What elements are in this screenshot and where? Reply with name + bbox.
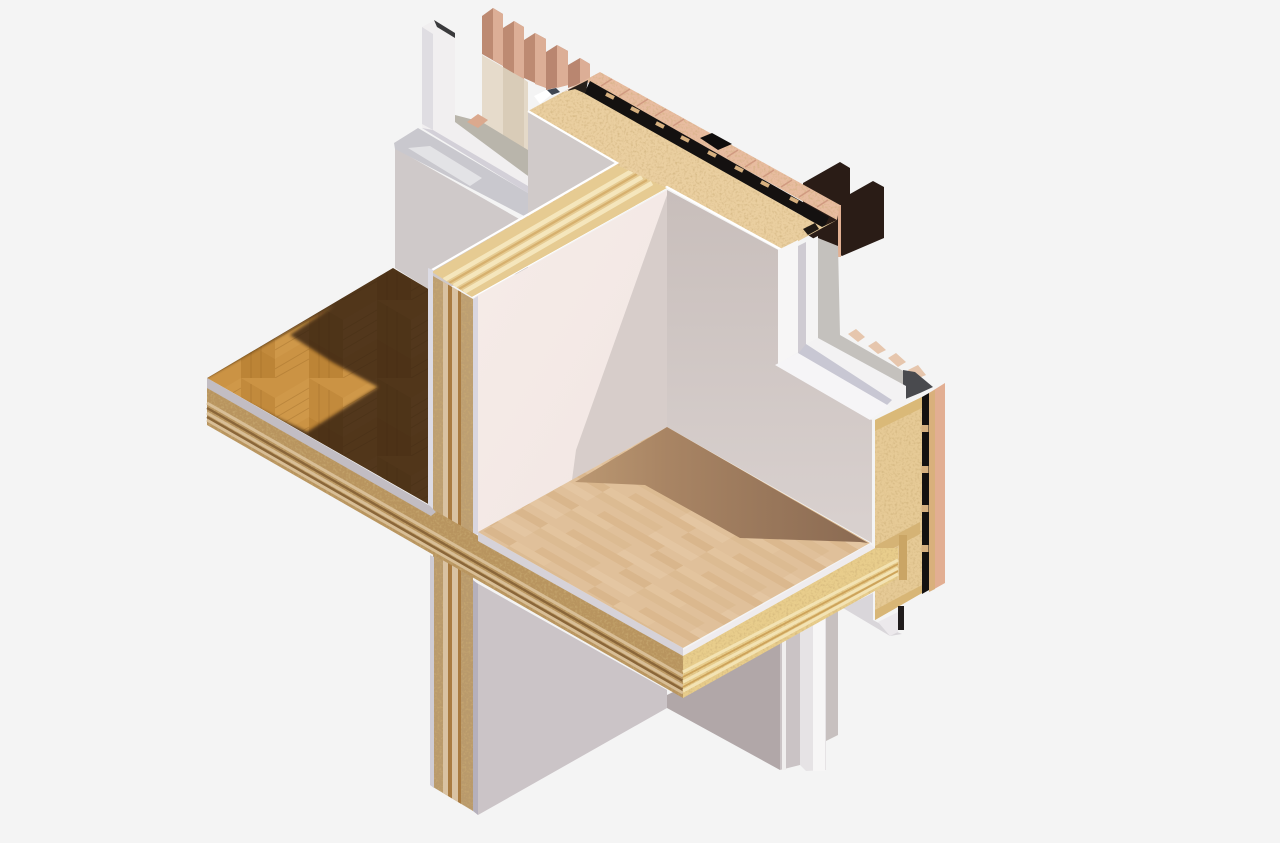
- top section: laminated wall stem: [432, 165, 667, 297]
- upper column inner edge strip: [473, 296, 478, 536]
- lower CLT column: [433, 554, 473, 811]
- window strip edge at rear of section: [534, 88, 560, 104]
- floor slab: laminated right face: [683, 548, 898, 698]
- main floor: oak planks: [478, 427, 875, 656]
- main room: right wall face: [667, 190, 872, 543]
- top section: pink batten strip: [563, 72, 840, 220]
- lower wall: left face: [475, 582, 667, 815]
- return wall: [528, 112, 617, 214]
- dark timber cladding at rear: [803, 162, 884, 257]
- illustration: isometric CLT wall and floor junction: [206, 8, 945, 815]
- upper pink battens: [482, 8, 590, 160]
- lower wall: right face and window: [667, 606, 838, 771]
- top section: OSB T-shaped wall cut: [432, 89, 837, 297]
- section cut: right wall OSB end: [875, 397, 922, 620]
- left upper wall edge strip: [428, 268, 433, 512]
- lower column edge strips: [430, 555, 478, 815]
- top section: black cavity: [568, 80, 829, 228]
- floor slab: grey finish strip on left: [207, 378, 683, 656]
- upper wall and sill: [394, 128, 528, 290]
- section cut: right wall black cavity and pink cladding: [922, 383, 945, 594]
- left floor: herringbone parquet: [207, 268, 428, 504]
- main room: left wall face: [475, 190, 667, 532]
- lower right underside soffit: [843, 593, 904, 636]
- upper CLT column: [433, 270, 473, 550]
- floor slab: long laminated left face: [207, 378, 683, 698]
- main room: right window opening: [775, 236, 933, 420]
- upper window frame: [422, 20, 528, 193]
